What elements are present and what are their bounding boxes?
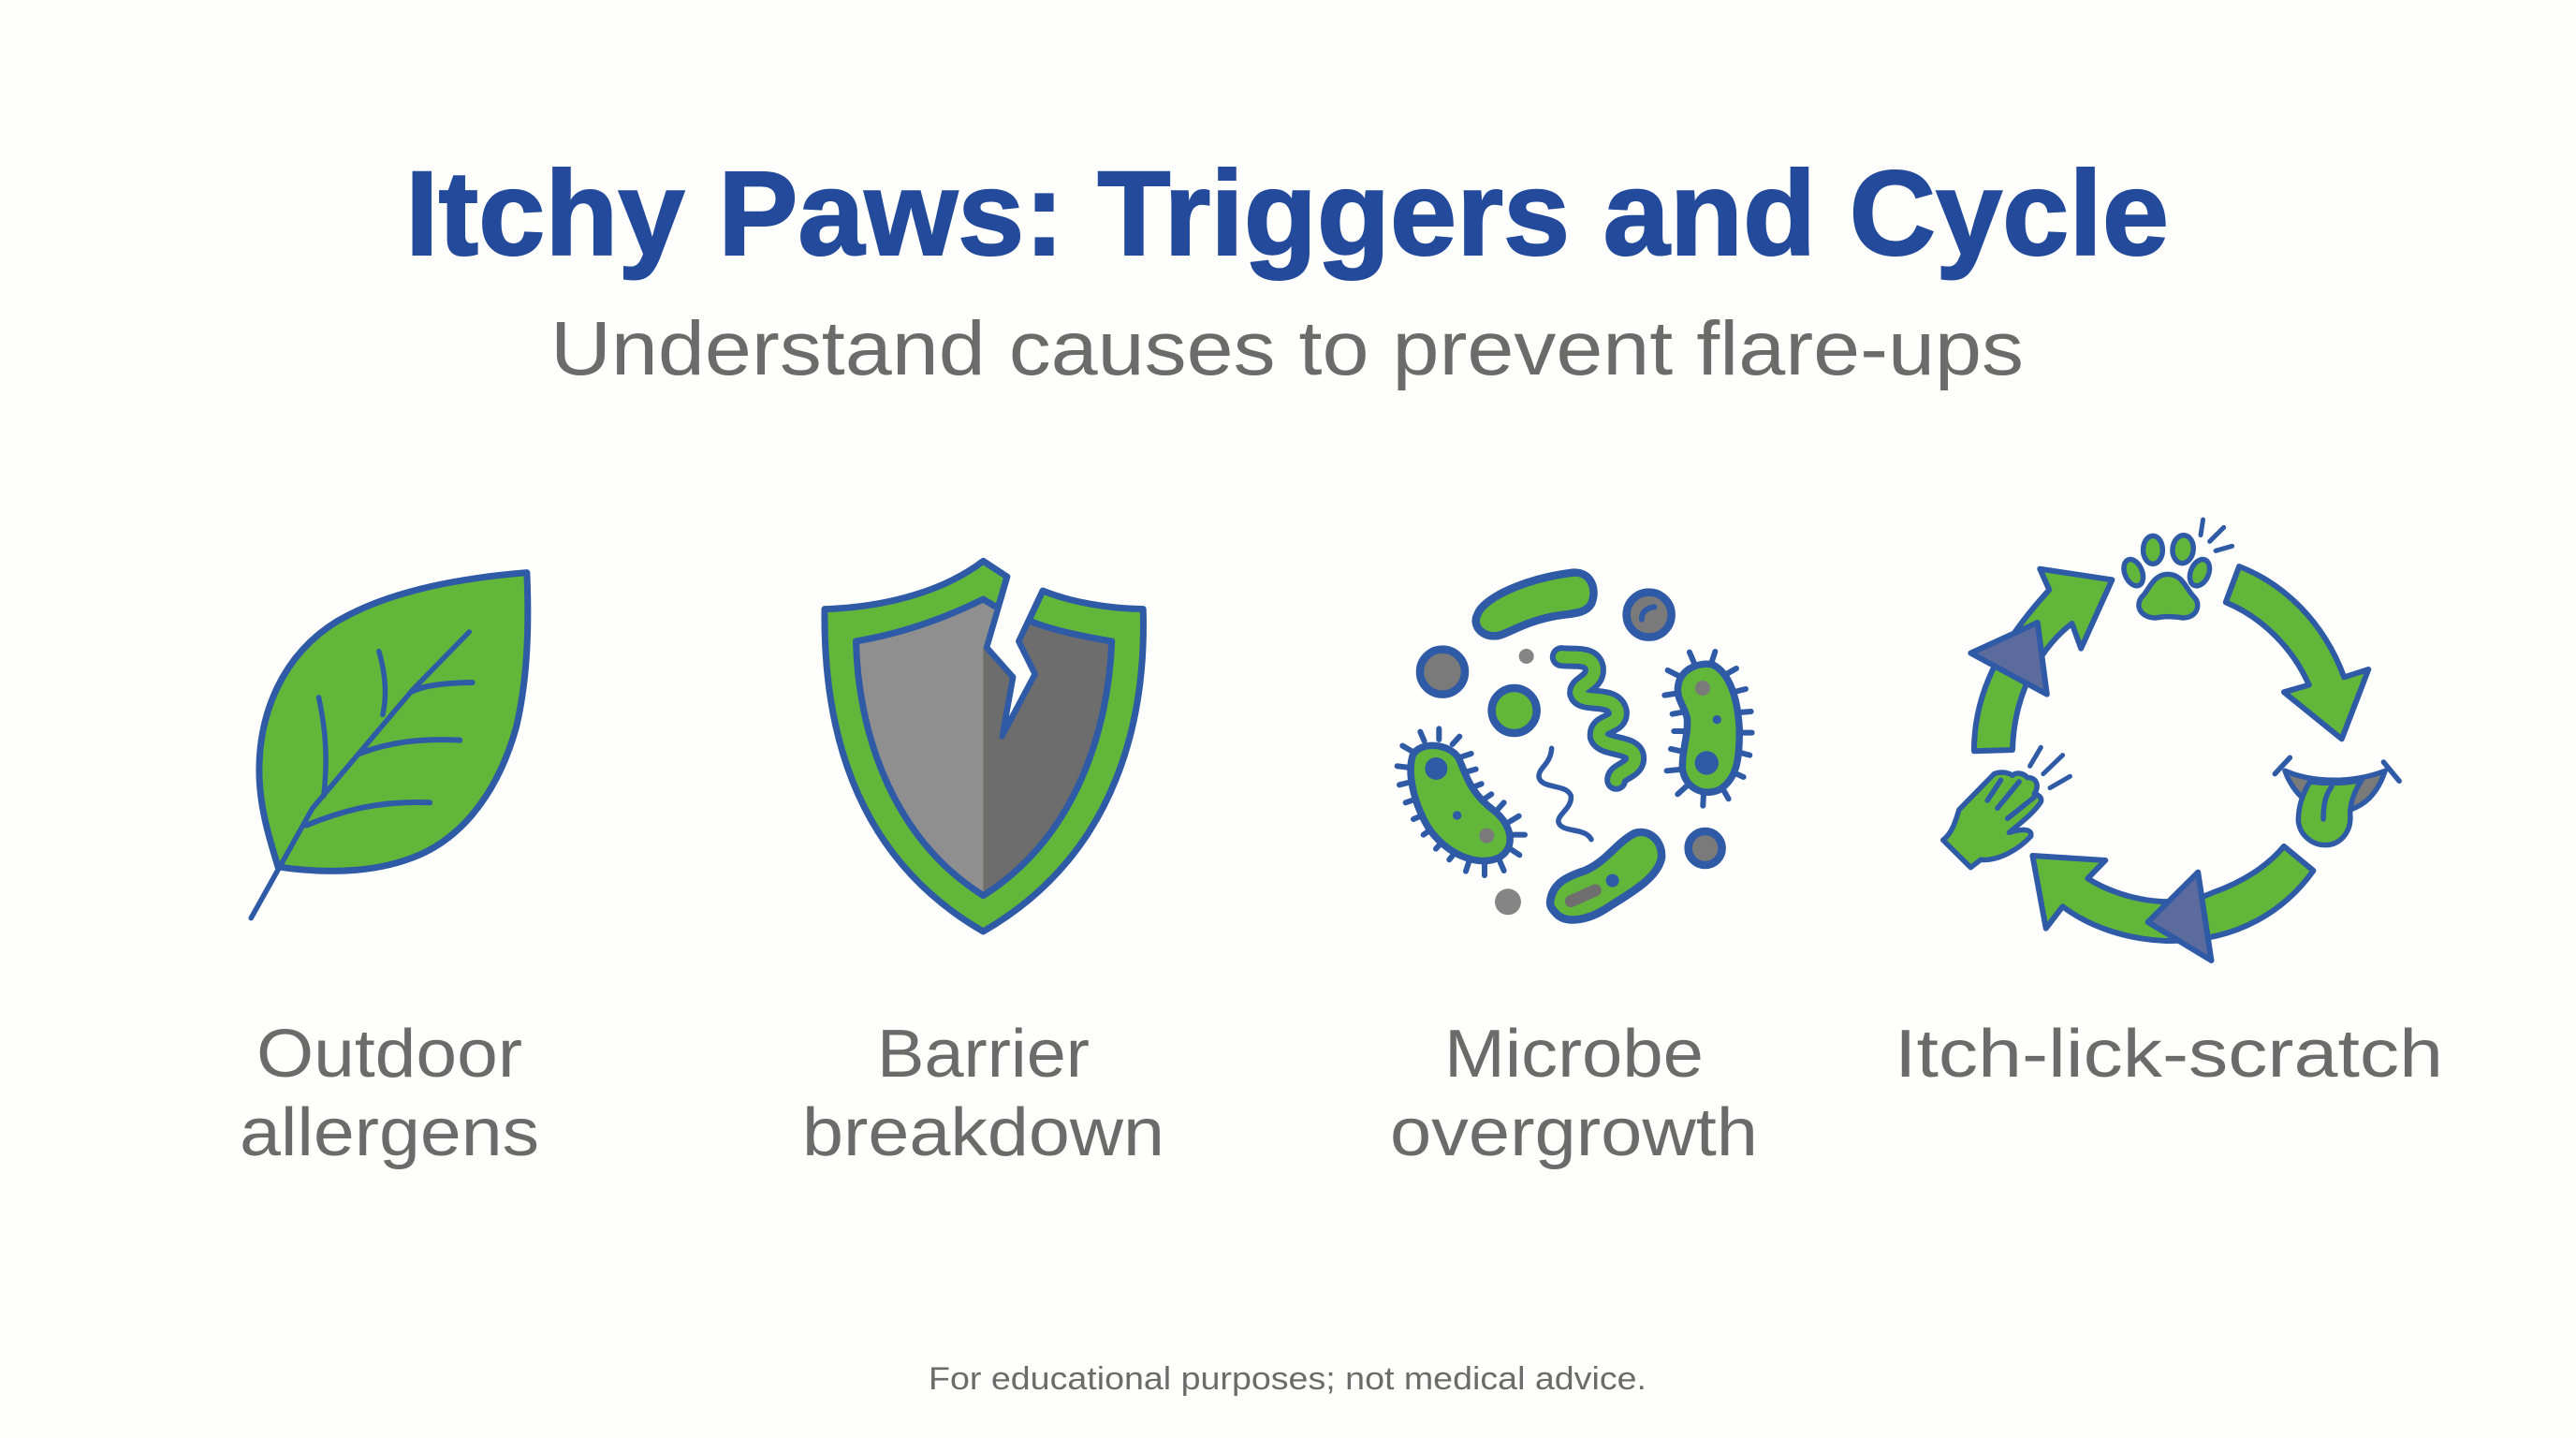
microbe: top rod (1476, 573, 1593, 636)
microbe: right bacterium (1664, 652, 1752, 806)
label: outdoor allergens: Outdoor (256, 1017, 522, 1092)
footer disclaimer: For educational purposes; not medical advice. (929, 1361, 1647, 1397)
label: barrier breakdown: breakdown (802, 1095, 1164, 1170)
arrow: left (1970, 569, 2112, 751)
icon: cracked shield (825, 561, 1143, 932)
label: outdoor allergens (240, 1017, 539, 1170)
microbe: thin spiral (1539, 748, 1591, 840)
label: itch-lick-scratch: Itch-lick-scratch (1895, 1017, 2443, 1092)
label: barrier breakdown (802, 1017, 1164, 1170)
label: barrier breakdown: Barrier (877, 1017, 1090, 1092)
label: microbe overgrowth (1390, 1017, 1758, 1170)
icon: leaf (251, 573, 528, 918)
icon: tongue (2275, 757, 2399, 845)
microbe: round spores (1420, 593, 1722, 915)
icon: itch-lick-scratch cycle (1943, 520, 2399, 961)
title: Itchy Paws: Triggers and Cycle (405, 147, 2169, 281)
label: microbe overgrowth: Microbe (1444, 1017, 1704, 1092)
label: microbe overgrowth: overgrowth (1390, 1095, 1758, 1170)
label: outdoor allergens: allergens (240, 1095, 539, 1170)
icon: paw (2120, 520, 2232, 618)
microbe: thick spiral (1561, 657, 1635, 780)
icon: scratching hand (1943, 747, 2070, 868)
subtitle: Understand causes to prevent flare-ups (550, 306, 2024, 391)
microbe: left bacterium (1398, 728, 1525, 875)
arrow: right (2226, 566, 2368, 739)
arrow: bottom (2032, 846, 2313, 961)
microbe: bottom rod (1550, 832, 1661, 919)
icon: microbes (1398, 573, 1752, 919)
